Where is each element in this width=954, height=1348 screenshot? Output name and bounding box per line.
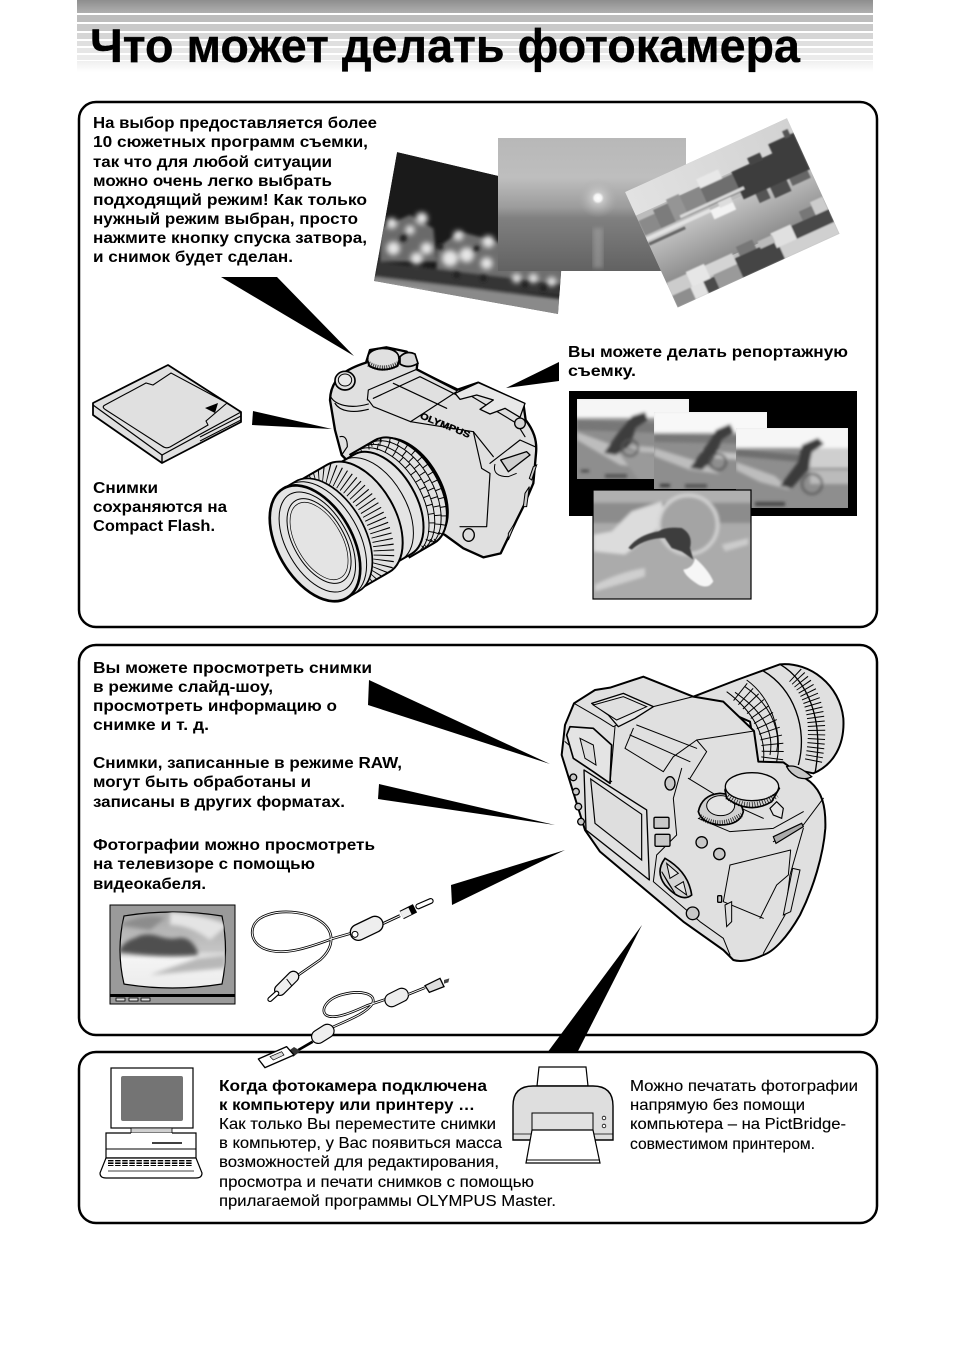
LCD screen [584, 770, 649, 880]
spike: to sequential text [506, 362, 559, 388]
text: direct printing: совместимом принтером. [630, 1136, 815, 1153]
text: RAW editing: записаны в других форматах. [93, 794, 345, 811]
spike: to TV text [451, 850, 565, 905]
icon: camera front view [268, 346, 538, 603]
text: TV playback: видеокабеля. [93, 876, 206, 893]
camera body [330, 347, 536, 557]
icon: camera back view [562, 664, 843, 961]
photo: sunset [498, 138, 686, 271]
text: connecting to computer: просмотра и печати снимков с помощью [219, 1174, 534, 1191]
text: connecting to computer [219, 1078, 556, 1210]
camera body [562, 677, 825, 961]
text: connecting to computer: Как только Вы переместите снимки [219, 1116, 496, 1133]
text: scene programs: подходящий режим! Как только [93, 192, 367, 209]
brand name: OLYMPUS [419, 411, 472, 440]
lens behind body [693, 664, 843, 773]
text: connecting to computer: к компьютеру или принтеру … [219, 1097, 475, 1114]
text: RAW editing [93, 755, 402, 811]
photo: mountain lake [625, 118, 840, 308]
text: slideshow [93, 660, 372, 734]
photo: night ship [370, 152, 570, 318]
panel: shooting [79, 102, 877, 627]
text: compact flash: Снимки [93, 480, 158, 497]
lens [268, 436, 449, 603]
title band [77, 0, 873, 72]
text: scene programs: так что для любой ситуации [93, 154, 332, 171]
text: scene programs: и снимок будет сделан. [93, 249, 293, 266]
icon: television [110, 905, 235, 1004]
text: slideshow: Вы можете просмотреть снимки [93, 660, 372, 677]
text: compact flash: сохраняются на [93, 499, 227, 516]
icon: USB cable [258, 978, 449, 1068]
text: scene programs: 10 сюжетных программ съемки, [93, 134, 368, 151]
text: direct printing: напрямую без помощи [630, 1097, 805, 1114]
icon: video cable [252, 901, 431, 999]
text: RAW editing: могут быть обработаны и [93, 774, 311, 791]
text: scene programs: нужный режим выбран, просто [93, 211, 358, 228]
text: connecting to computer: прилагаемой программы OLYMPUS Master. [219, 1193, 556, 1210]
text: scene programs: можно очень легко выбрать [93, 173, 332, 190]
top dials [698, 793, 743, 825]
spike: to slideshow text [368, 680, 550, 764]
text: RAW editing: Снимки, записанные в режиме RAW, [93, 755, 402, 772]
text: connecting to computer: в компьютер, у Вас появиться масса [219, 1135, 502, 1152]
text: connecting to computer: Когда фотокамера подключена [219, 1078, 487, 1095]
text: sequential shooting: съемку. [568, 363, 636, 380]
text: scene programs: нажмите кнопку спуска затвора, [93, 230, 367, 247]
text: TV playback: Фотографии можно просмотреть [93, 837, 375, 854]
viewfinder eyecup [567, 727, 612, 783]
four-way control pad [660, 858, 692, 898]
text: slideshow: снимке и т. д. [93, 717, 209, 734]
text: TV playback [93, 837, 375, 893]
side buttons [570, 774, 725, 920]
photo: surfer [588, 486, 755, 599]
shutter button [335, 371, 355, 390]
spike: to RAW text [378, 784, 555, 825]
spike: to printer [547, 925, 642, 1053]
spike: to text [221, 277, 354, 356]
title: Что может делать фотокамера [90, 19, 801, 72]
text: connecting to computer: возможностей для редактирования, [219, 1154, 499, 1171]
panel: playback [79, 645, 877, 1035]
icon: printer [513, 1067, 613, 1163]
text: scene programs: На выбор предоставляется более [93, 115, 377, 132]
icon: compact flash card [93, 365, 241, 463]
icon: computer [100, 1068, 202, 1178]
text: compact flash [93, 480, 227, 535]
hot shoe [592, 693, 653, 727]
text: slideshow: в режиме слайд-шоу, [93, 679, 273, 696]
text: slideshow: просмотреть информацию о [93, 698, 337, 715]
text: scene programs [93, 115, 377, 266]
text: TV playback: на телевизоре с помощью [93, 856, 315, 873]
mode dials [400, 352, 418, 367]
strap lug [501, 452, 530, 472]
text: compact flash: Compact Flash. [93, 518, 215, 535]
panel: computer and printer [79, 1052, 877, 1223]
text: sequential shooting [568, 344, 848, 380]
text: direct printing: компьютера – на PictBridge- [630, 1116, 846, 1133]
text: direct printing: Можно печатать фотографии [630, 1078, 858, 1095]
hot shoe [455, 383, 525, 417]
spike: to card [252, 411, 332, 429]
text: direct printing [630, 1078, 858, 1153]
text: sequential shooting: Вы можете делать репортажную [568, 344, 848, 361]
photo group: cyclist sequence [569, 391, 857, 516]
